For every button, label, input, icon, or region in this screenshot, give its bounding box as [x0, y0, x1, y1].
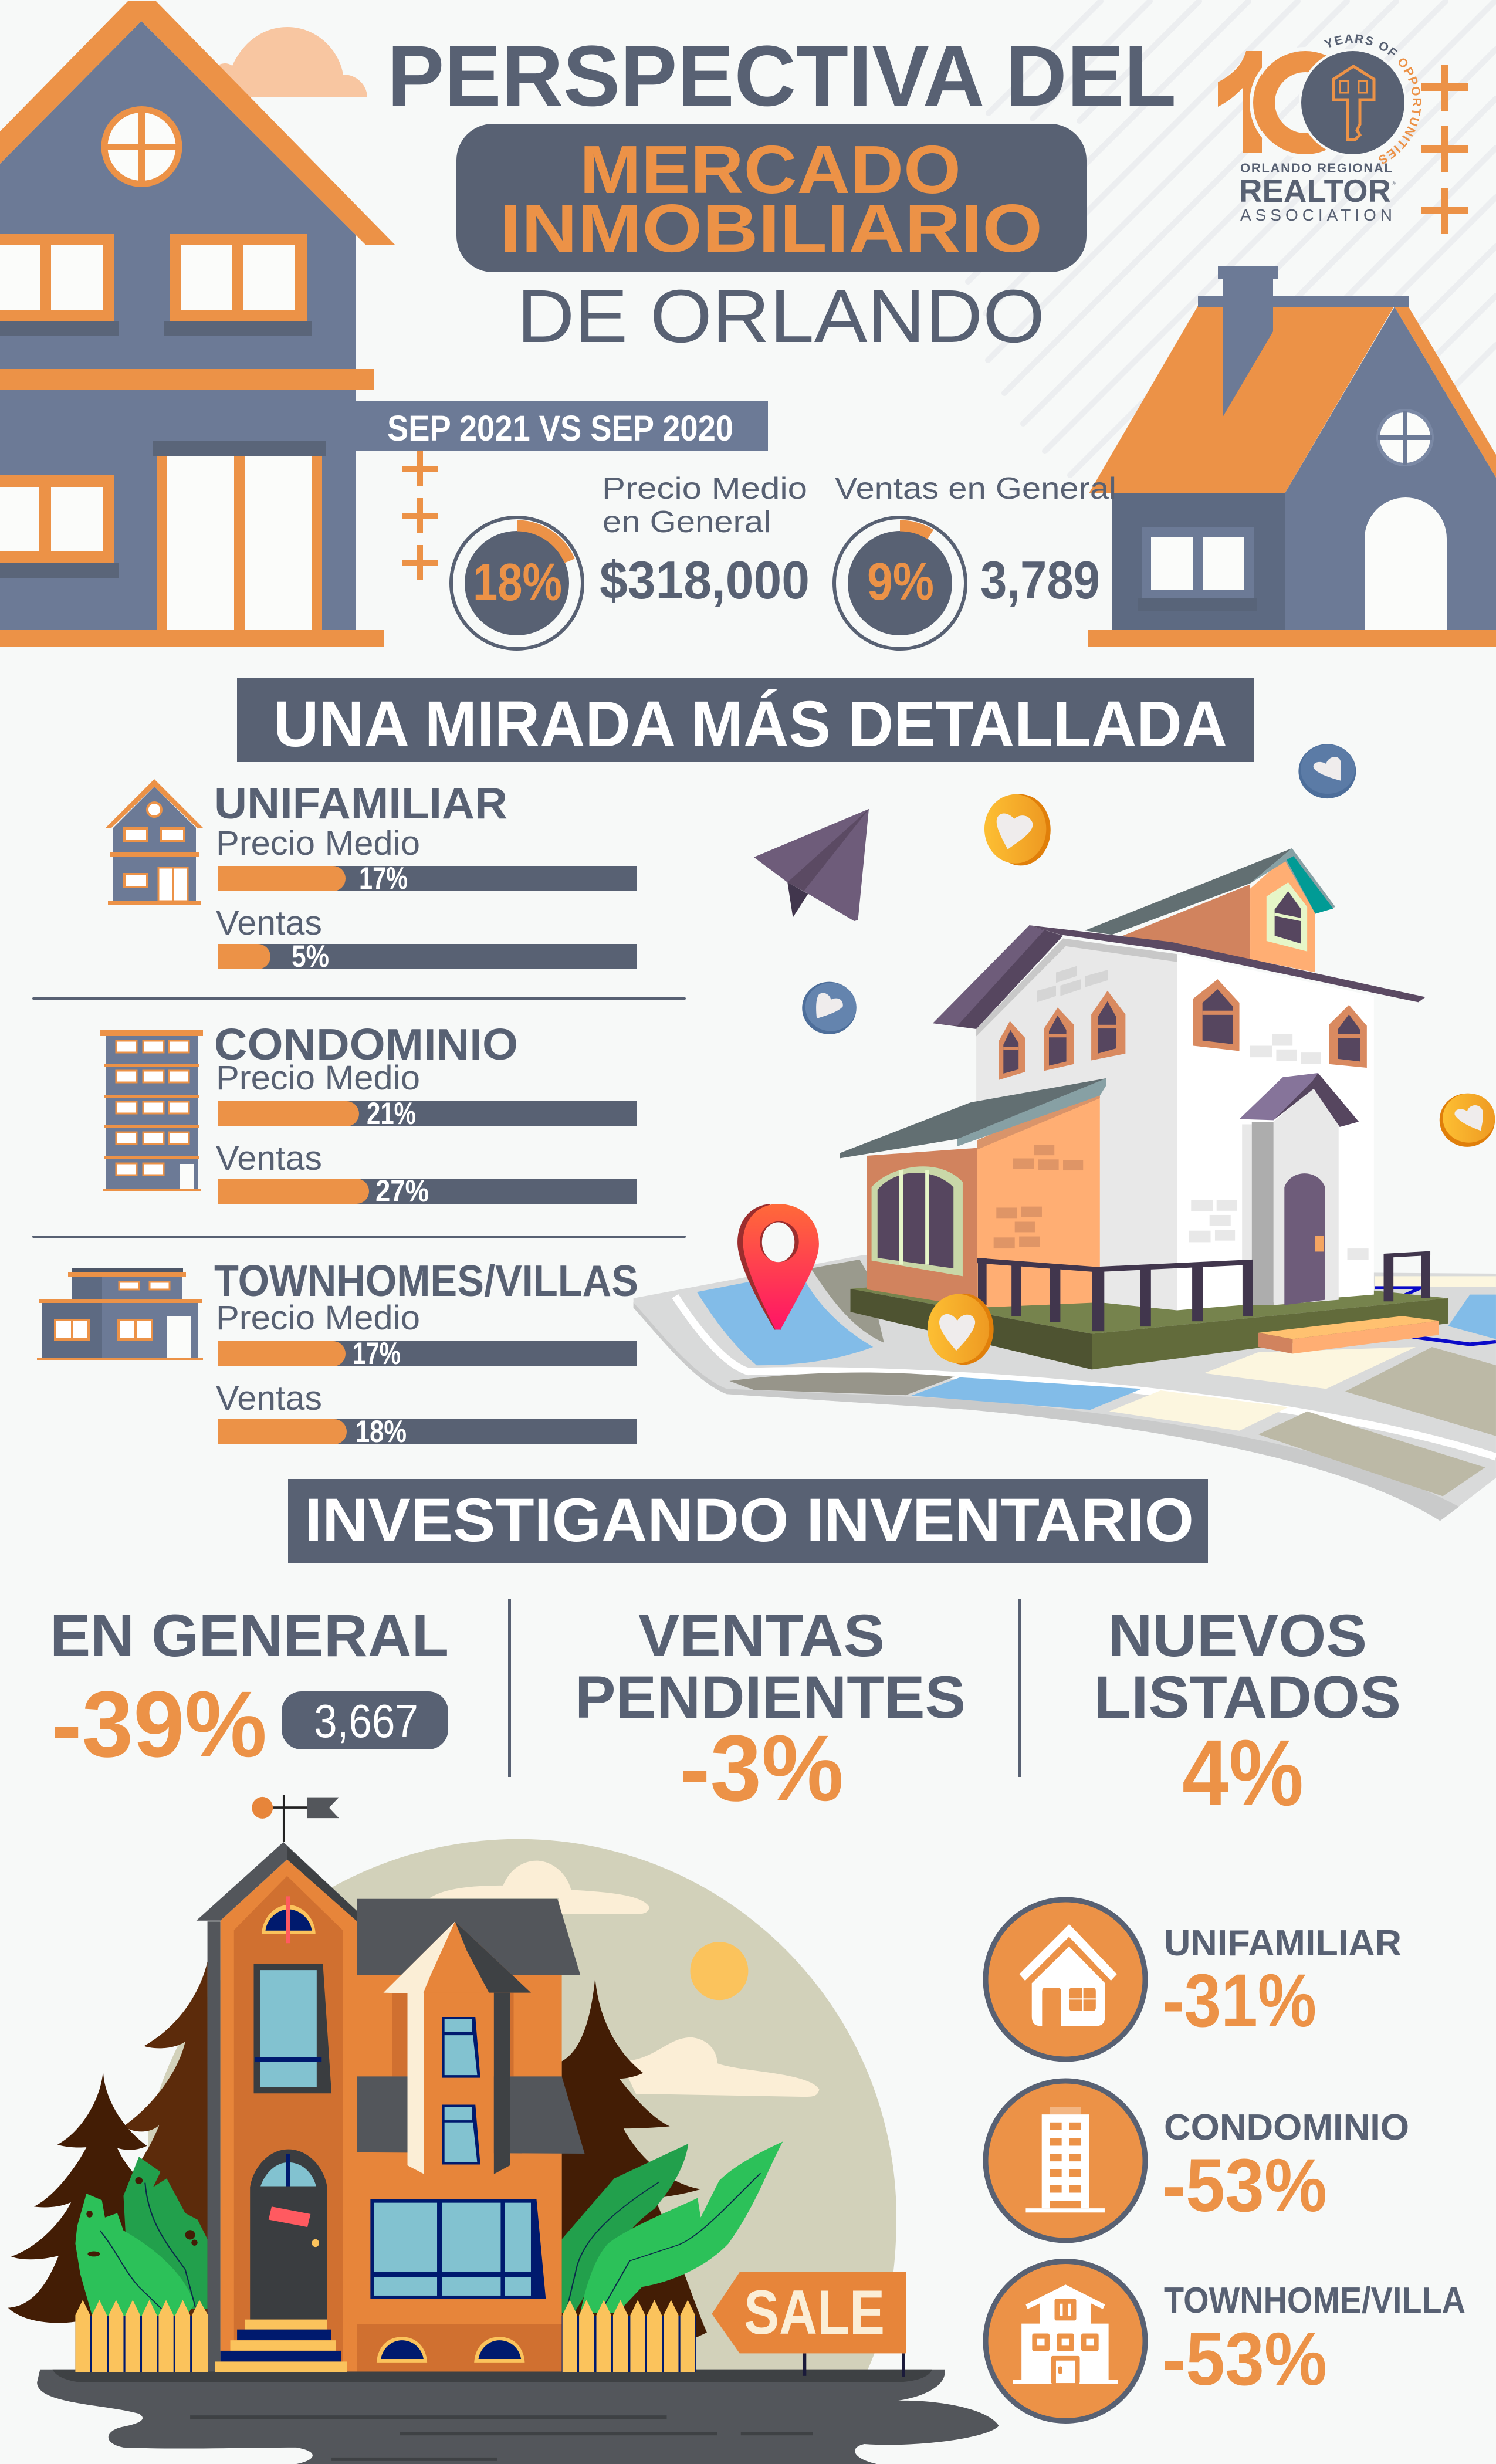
stat: en general [50, 1602, 449, 1776]
tree right [562, 1978, 707, 2370]
panel: townhomes: Ventas [216, 1379, 322, 1417]
chimney [1218, 266, 1278, 417]
label: unifamiliar: -31% [1162, 1959, 1316, 2043]
steps [215, 2320, 347, 2372]
main roof [933, 925, 1426, 1036]
bar: townhomes ventas 18% [218, 1414, 637, 1449]
porch [1240, 1073, 1359, 1305]
big window [370, 2199, 546, 2299]
circle icon: condominio [986, 2081, 1145, 2240]
label: townhome: -53% [1162, 2317, 1327, 2401]
bar: townhomes precio 17% [218, 1336, 637, 1371]
stat: nuevos listados: LISTADOS [1094, 1664, 1401, 1731]
background disc [148, 1839, 896, 2370]
upper left window [0, 234, 119, 336]
panel: unifamiliar: UNIFAMILIAR [214, 779, 507, 828]
label: townhome [1162, 2280, 1465, 2401]
panel: condominio: Ventas [216, 1139, 322, 1177]
stat: median price: $318,000 [600, 551, 810, 610]
bar: condominio precio 21%: 21% [367, 1096, 416, 1131]
stat: ventas pendientes [575, 1602, 966, 1820]
arched door [1365, 497, 1447, 630]
tall window [253, 1964, 331, 2093]
inventory count pill: 3,667 [314, 1695, 418, 1747]
stat: ventas pendientes: PENDIENTES [575, 1664, 966, 1731]
circle icon: unifamiliar [986, 1900, 1145, 2059]
annex roof [840, 1078, 1106, 1159]
plus signs left [402, 451, 438, 580]
door [153, 441, 326, 630]
gable windows [442, 2017, 480, 2165]
upper right window [164, 234, 312, 336]
panel: condominio: CONDOMINIO [214, 1020, 518, 1069]
panel: unifamiliar [106, 779, 637, 974]
bar: unifamiliar ventas 5%: 5% [292, 939, 329, 974]
mid roof [357, 2076, 585, 2154]
logo: Orlando Regional Realtor Association [1218, 34, 1421, 224]
stat: ventas pendientes: -3% [679, 1715, 844, 1820]
basement windows [377, 2337, 524, 2363]
panel: unifamiliar: Ventas [216, 904, 322, 942]
lower window [0, 475, 119, 578]
weather vane [252, 1795, 339, 1842]
label: unifamiliar: UNIFAMILIAR [1164, 1923, 1402, 1964]
white building [976, 938, 1374, 1310]
panel: condominio [100, 1020, 637, 1209]
panel: townhomes: Precio Medio [216, 1299, 420, 1337]
panel: inventory by type [986, 1900, 1465, 2421]
clouds [429, 1861, 819, 2097]
bar: condominio precio 21% [218, 1096, 637, 1131]
stat: sales: 3,789 [980, 551, 1100, 610]
title pill: INMOBILIARIO [500, 190, 1043, 266]
logo: Orlando Regional Realtor Association: REALTOR [1239, 172, 1391, 209]
railing [977, 1251, 1430, 1331]
arched window [872, 1166, 963, 1276]
small windows [999, 979, 1367, 1080]
house [197, 1842, 585, 2372]
sale text: SALE [744, 2277, 885, 2347]
icon: map pin [737, 1204, 819, 1329]
title pill: MERCADO [580, 131, 961, 208]
panel: left house illustration [0, 1, 395, 647]
icon: townhome [37, 1268, 203, 1360]
section heading: una mirada: UNA MIRADA MÁS DETALLADA [273, 688, 1227, 760]
logo: Orlando Regional Realtor Association: ORLANDO REGIONAL [1240, 161, 1392, 175]
bricks [994, 1145, 1083, 1248]
stat: en general: EN GENERAL [50, 1602, 449, 1669]
logo: Orlando Regional Realtor Association: ASSOCIATION [1240, 206, 1392, 224]
donut: sales 9% [834, 517, 966, 649]
title pill [456, 124, 1087, 272]
logo: Orlando Regional Realtor Association: YEARS OF OPPORTUNITIES [1324, 34, 1421, 164]
platform [851, 1266, 1448, 1369]
stat: median price: Precio Medio [602, 472, 807, 506]
icon: heart coin top [984, 794, 1051, 865]
roof [0, 1, 395, 245]
tower roof [197, 1842, 367, 1921]
door [250, 2150, 327, 2320]
attic window [262, 1896, 316, 1943]
panel: condominio: Precio Medio [216, 1059, 420, 1097]
stat: nuevos listados [1094, 1602, 1401, 1825]
title [387, 28, 1176, 358]
plus signs right [1421, 65, 1468, 234]
logo: Orlando Regional Realtor Association: ® [1392, 181, 1396, 187]
panel: unifamiliar: Precio Medio [216, 824, 420, 862]
fence left [75, 2300, 208, 2372]
label: condominio [1162, 2107, 1409, 2228]
icon: condo building [100, 1030, 203, 1191]
donut: median price 18% [451, 517, 583, 649]
title: PERSPECTIVA DEL [387, 28, 1176, 124]
round window [101, 106, 182, 187]
bar: unifamiliar precio 17%: 17% [359, 861, 408, 896]
annex [867, 1088, 1100, 1308]
sale sign [712, 2272, 906, 2353]
icon: paper plane [754, 809, 869, 921]
stat: median price [600, 472, 810, 610]
ground [37, 2370, 999, 2464]
bar: townhomes precio 17%: 17% [353, 1336, 401, 1371]
leaves [75, 2141, 783, 2317]
icon: heart coin right [1440, 1094, 1495, 1147]
stat: sales [835, 472, 1116, 610]
inventory count pill [282, 1691, 448, 1749]
icon: single family house [106, 779, 203, 905]
title: DE ORLANDO [517, 275, 1045, 358]
panel: bottom house illustration [8, 1795, 999, 2464]
roof [1089, 306, 1395, 493]
sale sign posts [803, 2353, 905, 2377]
tree back [120, 1961, 208, 2370]
bar: condominio ventas 27%: 27% [375, 1174, 429, 1209]
icon: heart coin front [928, 1294, 994, 1365]
bar: townhomes ventas 18%: 18% [356, 1414, 407, 1449]
plank [1258, 1316, 1439, 1354]
label: condominio: -53% [1162, 2144, 1327, 2228]
donut: sales 9%: 9% [867, 553, 934, 611]
window [1138, 527, 1257, 611]
stat: sales: Ventas en General [835, 472, 1116, 506]
panel: townhomes: TOWNHOMES/VILLAS [214, 1256, 638, 1305]
cloud [219, 27, 367, 97]
icon: heart coin blue left [802, 982, 857, 1034]
bar: condominio ventas 27% [218, 1174, 637, 1209]
panel: right house illustration [1088, 266, 1496, 647]
label: condominio: CONDOMINIO [1164, 2107, 1409, 2148]
stat: nuevos listados: NUEVOS [1108, 1602, 1367, 1669]
circle icon: townhome [986, 2261, 1145, 2421]
key icon [1333, 66, 1374, 140]
label: unifamiliar [1162, 1923, 1402, 2043]
bar: unifamiliar precio 17% [218, 861, 637, 896]
tree left [8, 2070, 185, 2370]
date band: SEP 2021 VS SEP 2020 [387, 408, 733, 448]
bar: unifamiliar ventas 5% [218, 939, 637, 974]
label: townhome: TOWNHOME/VILLA [1164, 2280, 1465, 2321]
dormer [1085, 848, 1335, 973]
round window [1378, 411, 1432, 465]
stat: en general: -39% [51, 1671, 267, 1776]
upper roof [357, 1899, 580, 1975]
stat: ventas pendientes: VENTAS [638, 1602, 885, 1669]
fence right [562, 2300, 696, 2372]
icon: heart coin blue top right [1298, 744, 1356, 798]
panel: townhomes [37, 1256, 638, 1449]
map [634, 1255, 1496, 1521]
sun [690, 1942, 748, 2000]
stat: median price: en General [603, 505, 771, 539]
panel: main isometric house illustration [634, 744, 1496, 1521]
section heading: investigando inventario: INVESTIGANDO INVENTARIO [304, 1486, 1194, 1555]
donut: median price 18%: 18% [473, 553, 562, 612]
central gable [383, 1921, 531, 2174]
stat: nuevos listados: 4% [1182, 1720, 1304, 1825]
